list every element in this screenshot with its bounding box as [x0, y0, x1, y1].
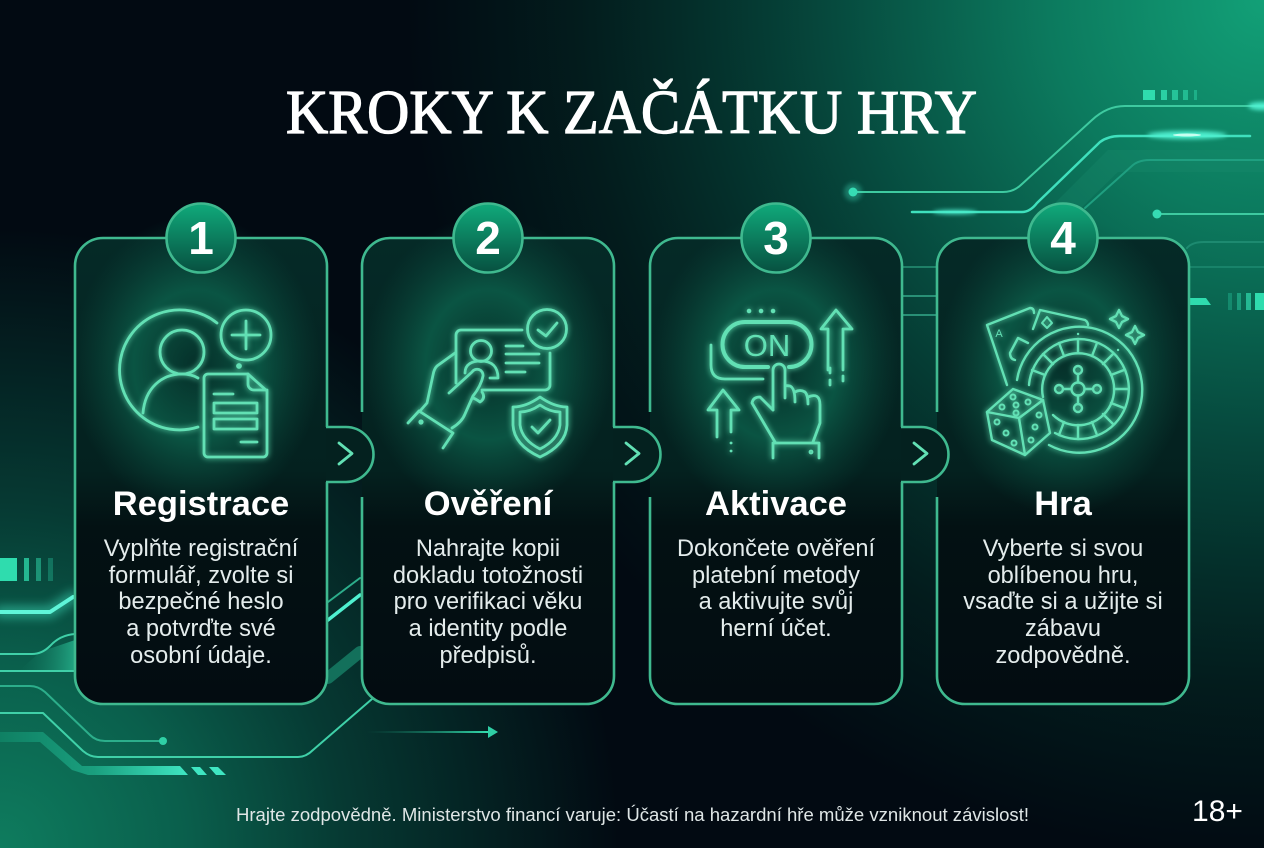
arrow: step 1 to step 2	[326, 427, 373, 482]
text: step 1 description: formulář, zvolte si	[109, 563, 293, 589]
heading: Ověření: Ověření	[424, 485, 554, 523]
text: step 1 description: a potvrďte své	[126, 616, 276, 642]
text: step 4 description: oblíbenou hru,	[988, 563, 1138, 589]
text: step 1 description: Vyplňte registrační	[104, 536, 299, 562]
step number 2: 2	[475, 212, 501, 264]
heading: Aktivace: Aktivace	[705, 485, 847, 523]
decorative bars: right	[1190, 293, 1264, 310]
step number 3: 3	[763, 212, 789, 264]
icon: hand with id card and shield	[408, 310, 567, 457]
text: step 4 description: vsaďte si a užijte si	[963, 589, 1163, 615]
text: step 3 description: platební metody	[692, 563, 860, 589]
decorative bars: left	[0, 558, 53, 581]
step number 1: 1	[188, 212, 214, 264]
panel: step 2 ověření	[362, 204, 614, 704]
footer warning: Hrajte zodpovědně. Ministerstvo financí varuje: Účastí na hazardní hře může vzniknout závislost!	[236, 804, 1029, 825]
step number 4	[1028, 204, 1098, 272]
text: step 3 description: herní účet.	[720, 616, 832, 642]
heading: Hra: Hra	[1034, 485, 1093, 523]
panel: step 4 hra	[937, 204, 1189, 704]
arrow: step 3 to step 4	[901, 427, 948, 482]
text: step 2 description: předpisů.	[439, 643, 537, 669]
arrow: step 2 to step 3	[613, 427, 660, 482]
text: step 4 description: zábavu	[1025, 616, 1101, 642]
text: step 2 description: a identity podle	[409, 616, 567, 642]
circuit lines: top right	[844, 102, 1264, 315]
title: KROKY K ZAČÁTKU HRY	[286, 79, 977, 147]
text: step 3 description: a aktivujte svůj	[699, 589, 853, 615]
circuit lines: bottom left	[0, 578, 372, 775]
heading: Registrace: Registrace	[113, 485, 289, 523]
age badge 18+: 18+	[1192, 795, 1243, 828]
panel: step 3 aktivace	[650, 204, 902, 704]
step number 4: 4	[1050, 212, 1076, 264]
text: step 2 description: pro verifikaci věku	[394, 589, 582, 615]
icon: on button with pointing hand: ON	[744, 328, 790, 363]
decorative bars: top right	[1143, 90, 1197, 100]
text: step 2 description: Nahrajte kopii	[416, 536, 560, 562]
text: step 3 description: Dokončete ověření	[677, 536, 875, 562]
step number 1	[166, 204, 236, 272]
panel: step 1 registrace	[71, 204, 327, 704]
icon: cards, roulette and dice: A	[995, 328, 1003, 340]
text: step 4 description: zodpovědně.	[995, 643, 1131, 669]
step number 3	[742, 204, 810, 272]
icon: cards, roulette and dice	[987, 308, 1144, 455]
step number 2	[454, 204, 522, 272]
icon: on button with pointing hand	[708, 310, 852, 458]
arrow: bottom decorative	[367, 726, 498, 738]
icon: user with document	[120, 310, 271, 457]
text: step 1 description: osobní údaje.	[130, 643, 272, 669]
text: step 2 description: dokladu totožnosti	[393, 563, 583, 589]
text: step 1 description: bezpečné heslo	[118, 589, 284, 615]
text: step 4 description: Vyberte si svou	[983, 536, 1143, 562]
